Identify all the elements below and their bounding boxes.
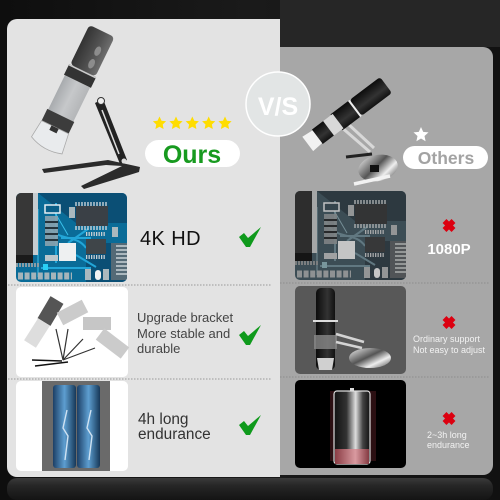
check mark <box>239 325 261 345</box>
image: grey circuit <box>295 191 406 280</box>
top right background shade <box>280 0 500 47</box>
microscope body <box>29 24 118 156</box>
label: 4h long <box>138 411 188 428</box>
row: resolution others <box>295 191 471 280</box>
panel: ours <box>7 19 280 477</box>
label: Not easy to adjust <box>413 345 486 355</box>
star: others <box>414 127 428 141</box>
versus badge: V/S <box>258 93 298 121</box>
badge: ours: Ours <box>163 141 221 169</box>
label: Upgrade bracket <box>137 310 233 325</box>
badge: others: Others <box>418 148 474 168</box>
label: Ordinary support <box>413 334 481 344</box>
clip stand <box>340 122 400 185</box>
row: endurance ours <box>16 381 261 471</box>
microscope body <box>302 77 392 152</box>
image: batteries <box>16 381 128 471</box>
rating stars: ours <box>153 116 232 129</box>
image: grey clip stand <box>295 286 406 374</box>
label: endurance <box>138 426 211 443</box>
floor reflection <box>7 478 493 500</box>
row: resolution ours <box>16 193 261 282</box>
badge: others <box>403 146 488 169</box>
panel: others <box>262 47 493 475</box>
row: support others <box>295 286 486 374</box>
image: circuit board <box>16 193 127 282</box>
check mark <box>239 227 261 247</box>
stand <box>42 98 140 189</box>
cross <box>444 318 454 327</box>
image: low battery <box>295 380 406 468</box>
cross <box>444 221 454 230</box>
label: endurance <box>427 440 470 450</box>
row: endurance others <box>295 380 470 468</box>
label: 1080P <box>427 241 471 258</box>
row: support ours <box>16 287 261 377</box>
label: 4K HD <box>140 228 201 250</box>
label: 2~3h long <box>427 430 467 440</box>
check mark <box>239 415 261 435</box>
label: durable <box>137 341 180 356</box>
cross <box>444 414 454 423</box>
versus badge <box>246 72 310 136</box>
microscope: others <box>302 77 400 185</box>
label: More stable and <box>137 326 230 341</box>
badge: ours <box>145 140 240 169</box>
microscope: ours <box>29 24 140 189</box>
image: adjustable bracket <box>16 287 128 377</box>
